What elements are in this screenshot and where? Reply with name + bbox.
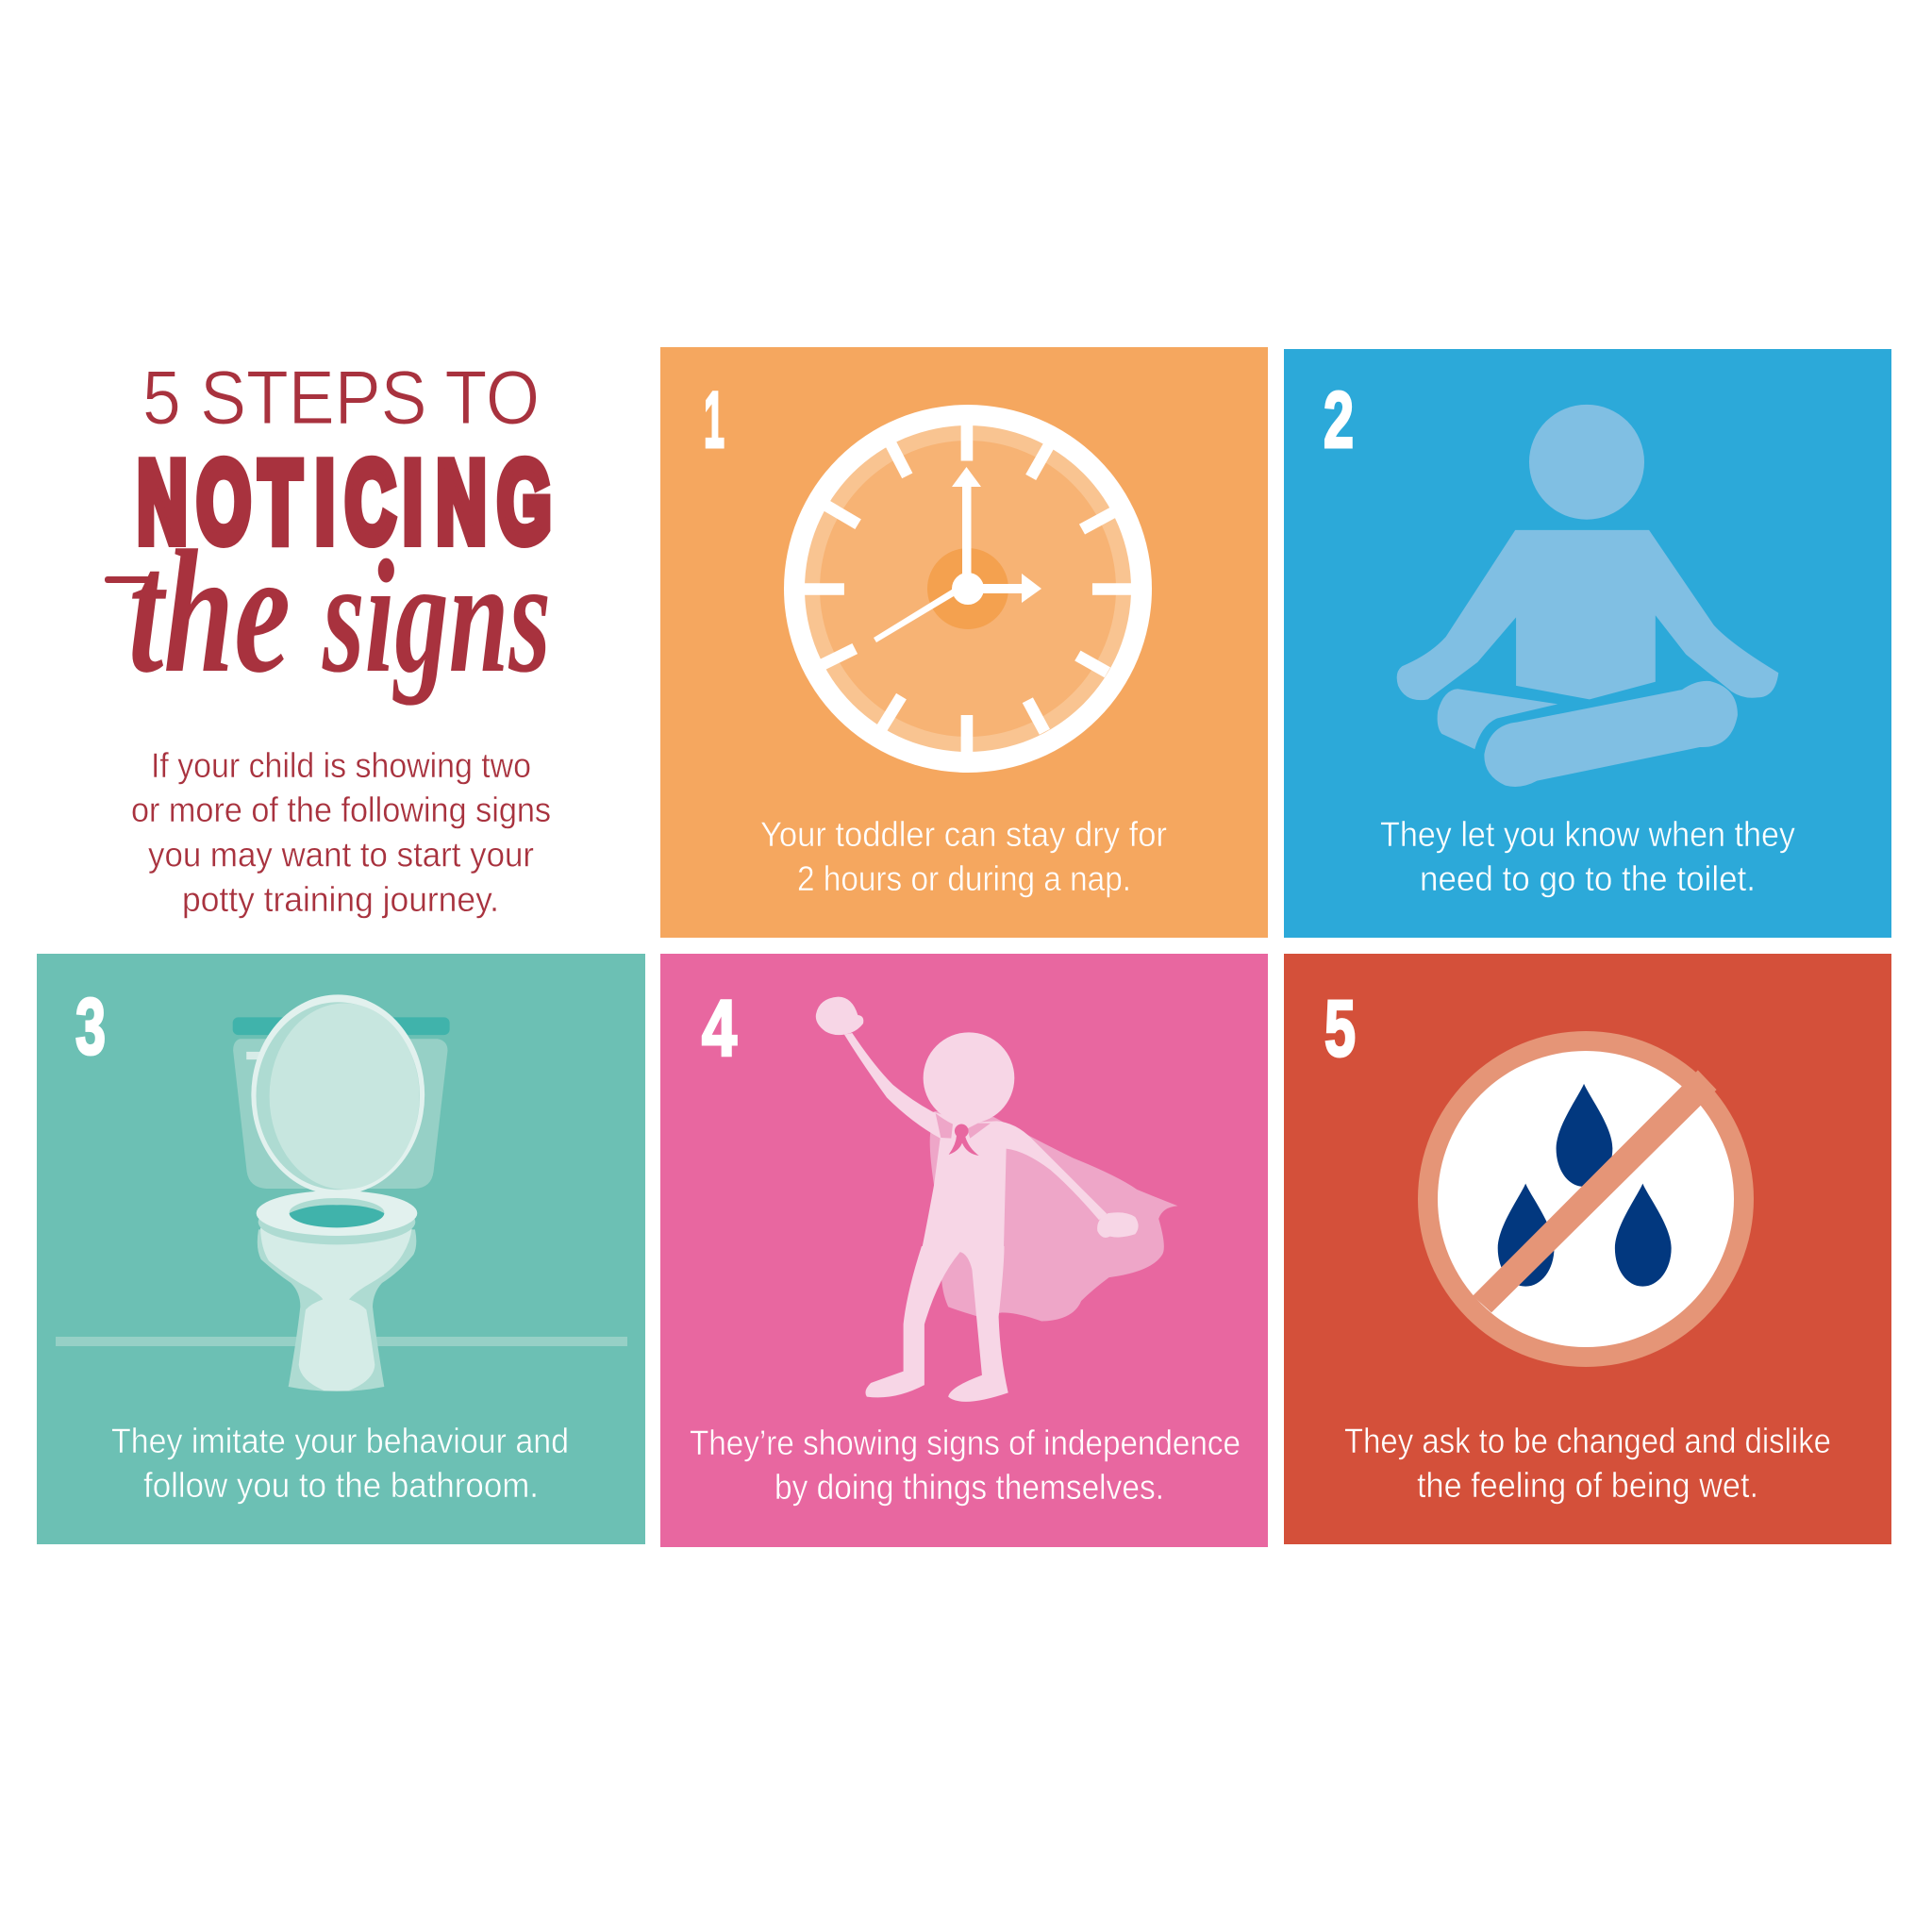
number 5: 5 bbox=[1324, 984, 1356, 1073]
panel 3: imitate bbox=[37, 954, 645, 1544]
icon: no water drops sign bbox=[1418, 1031, 1754, 1367]
caption: the feeling of being wet. bbox=[1417, 1465, 1758, 1505]
title line: the signs: the bbox=[128, 514, 291, 709]
title line: 5 steps to: 5 STEPS TO bbox=[142, 356, 540, 441]
panel background bbox=[660, 954, 1268, 1547]
panel background bbox=[1284, 954, 1891, 1544]
cape knot bbox=[949, 1124, 979, 1156]
intro paragraph: or more of the following signs bbox=[131, 791, 551, 829]
caption: They’re showing signs of independence bbox=[690, 1423, 1241, 1462]
caption bbox=[690, 1423, 1241, 1507]
caption: follow you to the bathroom. bbox=[143, 1465, 539, 1505]
caption: need to go to the toilet. bbox=[1420, 858, 1756, 898]
intro paragraph: potty training journey. bbox=[182, 880, 499, 919]
panel background bbox=[37, 954, 645, 1544]
icon: clock bbox=[784, 405, 1152, 773]
caption: They let you know when they bbox=[1380, 814, 1795, 854]
caption: They imitate your behaviour and bbox=[111, 1421, 569, 1460]
number 3: 3 bbox=[75, 982, 106, 1071]
caption bbox=[1344, 1421, 1831, 1505]
caption bbox=[1380, 814, 1795, 898]
caption: by doing things themselves. bbox=[774, 1467, 1164, 1507]
title line: the signs: signs bbox=[322, 527, 551, 707]
clock hands bbox=[874, 467, 1041, 642]
panel background bbox=[660, 347, 1268, 938]
icon: seated child bbox=[1397, 405, 1778, 787]
panel background bbox=[1284, 349, 1891, 938]
number 4: 4 bbox=[702, 984, 737, 1073]
intro paragraph bbox=[131, 746, 551, 919]
icon: toilet bbox=[56, 994, 627, 1391]
caption: 2 hours or during a nap. bbox=[797, 858, 1131, 898]
caption bbox=[760, 814, 1167, 898]
panel 5: dislikes wet bbox=[1284, 954, 1891, 1544]
panel 1: stay dry: 1 bbox=[704, 375, 724, 464]
number 2: 2 bbox=[1324, 375, 1354, 464]
caption: Your toddler can stay dry for bbox=[760, 814, 1167, 854]
panel 1: stay dry bbox=[660, 347, 1268, 938]
title line: the signs bbox=[105, 514, 551, 709]
caption: They ask to be changed and dislike bbox=[1344, 1421, 1831, 1460]
intro block bbox=[105, 356, 551, 919]
icon: superhero child bbox=[816, 997, 1177, 1402]
panel 4: independence bbox=[660, 954, 1268, 1547]
panel 2: tells you bbox=[1284, 349, 1891, 938]
intro paragraph: you may want to start your bbox=[148, 836, 534, 874]
intro paragraph: If your child is showing two bbox=[151, 746, 531, 785]
caption bbox=[111, 1421, 569, 1505]
title line: noticing: NOTICING bbox=[138, 439, 551, 567]
